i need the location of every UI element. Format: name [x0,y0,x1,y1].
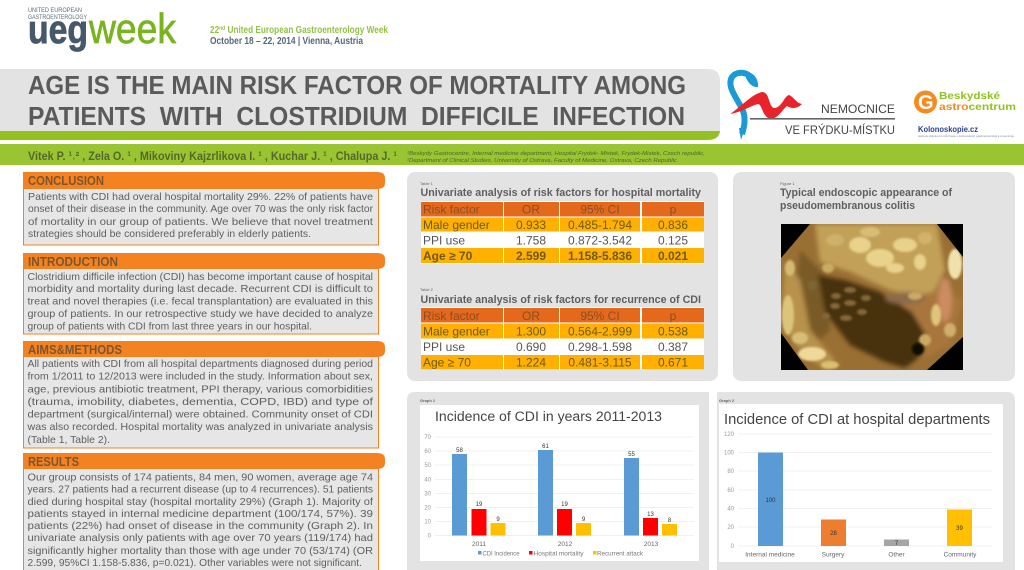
panel: aims and methods: AIMS&METHODS [28,342,122,357]
table 2: recurrence of CDI: 0.481-3.115 [568,356,632,370]
chart: grouped bars 2011-2013: 30 [424,492,432,498]
chart: department bars: 28 [830,531,837,537]
panel: introduction: morbidity and mortality during last decade. Recurrent CDI is difficult to [28,283,373,295]
table 2: recurrence of CDI: 0.387 [658,340,688,354]
chart: grouped bars 2011-2013: 20 [424,506,432,512]
table 2: recurrence of CDI: Table 2 [420,287,434,292]
panel: results: died during hospital stay (hospital mortality 29%) (Graph 1). Majority of [28,496,373,508]
panel: graph 1 incidence in years: Incidence of CDI in years 2011-2013 [435,409,662,424]
chart: grouped bars 2011-2013: 0 [428,534,432,540]
panel: introduction: group of patients. In our retrospective study we have decided to analyze [28,308,373,320]
logo: Nemocnice ve Frýdku-Místku [730,72,895,140]
logo: UEG Week: ueg [28,8,88,52]
logo: Kolonoskopie.cz: Kolonoskopie.cz [918,124,978,134]
table 2: recurrence of CDI: 1.300 [516,324,546,338]
logo: UEG Week [28,5,177,52]
panel: graph 2 incidence at departments: Incidence of CDI at hospital departments [724,412,990,428]
panel: aims and methods: department (surgical/internal) were obtained. Community onset of CDI [28,408,373,420]
chart: department bars: Other [888,552,905,558]
chart: department bars [724,432,992,558]
panel: conclusion: Patients with CDI had overal hospital mortality 29%. 22% of patients have [28,191,373,203]
logo: UEG Week: UNITED EUROPEAN [28,8,82,14]
table 2: recurrence of CDI: 0.564-2.999 [568,324,632,338]
table 2: recurrence of CDI: 95% CI [580,309,620,323]
panel: aims and methods: (Table 1, Table 2). [28,434,110,446]
panel: figure 1 endoscopic image [733,172,1015,381]
logo: Beskydské Gastrocentrum [914,90,1016,114]
authors and affiliations band: ²Department of Clinical Studies, University of Ostrava, Faculty of Medicine, Ostrava, Czech Republic [407,158,677,164]
authors and affiliations band: Vitek P. ¹˒² , Zela O. ¹ , Mikoviny Kajzrlikova I. ¹ , Kuchar J. ¹ , Chalupa J. ¹ [28,149,397,163]
table 2: recurrence of CDI: 0.690 [516,340,546,354]
chart: department bars: 120 [724,432,735,438]
logo: UEG Week: GASTROENTEROLOGY [28,15,87,21]
logo: Nemocnice ve Frýdku-Místku: VE FRÝDKU-MÍSTKU [785,122,895,137]
chart: grouped bars 2011-2013: 2013 [644,541,659,548]
chart: grouped bars 2011-2013: 2012 [558,541,573,548]
chart: grouped bars 2011-2013: 40 [424,478,432,484]
table 2: recurrence of CDI: 1.224 [516,356,546,370]
chart: grouped bars 2011-2013: 58 [456,448,463,454]
logo: Kolonoskopie.cz: webová stránka pro informace o kolonoskopii, gastroenterologii a screeningu [918,135,1015,138]
table 1: hospital mortality: PPI use [423,234,465,248]
chart: grouped bars 2011-2013: 61 [542,444,549,450]
event information: nd [219,26,225,32]
table 2: recurrence of CDI: 0.538 [658,324,688,338]
chart legend: Hospital mortality [534,550,584,558]
chart: department bars: 7 [895,541,899,547]
logo: Beskydské Gastrocentrum: Beskydské [939,91,1001,102]
panel: aims and methods: (trauma, imobility, diabetes, dementia, COPD, IBD) and type of [28,396,373,408]
event information [210,25,388,47]
table 2: recurrence of CDI: Risk factor [423,309,480,323]
chart: department bars: Surgery [822,552,845,558]
table 2: recurrence of CDI: p [670,309,677,323]
title banner: PATIENTS WITH CLOSTRIDIUM DIFFICILE INFECTION [28,101,685,131]
chart: grouped bars 2011-2013: 50 [424,463,432,469]
chart: grouped bars 2011-2013: 9 [582,517,586,523]
panel: results: years. 27 patients had a recurrent disease (up to 4 recurrences). 51 patients [28,484,373,496]
panel: conclusion: onset of their disease in the community. Age over 70 was the only risk factor [28,203,373,215]
chart: grouped bars 2011-2013: 60 [424,449,432,455]
panel: graph 2 incidence at departments [717,392,1015,570]
panel: aims and methods: age, previous antibiotic treatment, PPI therapy, various comorbidities [28,384,373,396]
chart: department bars: 39 [956,526,963,532]
chart: grouped bars 2011-2013: 19 [476,502,483,508]
panel: figure 1 endoscopic image: pseudomembranous colitis [780,200,915,212]
chart: department bars: Internal medicine [745,552,795,558]
chart: department bars: Community [944,552,977,558]
logo: Beskydské Gastrocentrum: astro centrum [939,102,1016,113]
chart: department bars: 80 [727,469,735,475]
table 1: hospital mortality [420,181,704,264]
logo: Kolonoskopie.cz [918,124,1015,138]
table 1: hospital mortality: Table 1 [420,181,434,186]
chart: department bars: 100 [765,498,776,504]
chart: department bars: 40 [727,506,735,512]
logo: Nemocnice ve Frýdku-Místku: NEMOCNICE [821,102,895,116]
panel: conclusion: of mortality in our group of patients. We believe that novel treatment [28,216,373,228]
panel: aims and methods: from 1/2011 to 12/2013 were included in the study. Information about sex, [28,370,373,382]
panel: introduction [23,253,385,334]
table 1: hospital mortality: Univariate analysis of risk factors for hospital mortality [420,187,702,199]
logo: UEG Week: week [88,5,177,52]
panel: figure 1 endoscopic image: Typical endoscopic appearance of [780,187,952,199]
chart: grouped bars 2011-2013: 19 [561,502,568,508]
panel: aims and methods: All patients with CDI from all hospital departments diagnosed during period [28,358,373,370]
event information: 22 [210,25,221,36]
chart: grouped bars 2011-2013: 55 [628,452,635,458]
chart: grouped bars 2011-2013: 10 [424,520,432,526]
chart: grouped bars 2011-2013: 13 [647,512,654,518]
panel: graph 2 incidence at departments: Graph 2 [719,398,735,403]
table 1: hospital mortality: Male gender [423,218,490,232]
table 1: hospital mortality: 0.872-3.542 [568,234,632,248]
title banner: AGE IS THE MAIN RISK FACTOR OF MORTALITY AMONG [28,70,686,100]
table 1: hospital mortality: 95% CI [580,202,620,216]
chart legend [478,550,644,558]
panel: introduction: treat and novel therapies (i.e. fecal transplantation) are evaluated in this [28,296,373,308]
table 2: recurrence of CDI: Univariate analysis of risk factors for recurrence of CDI [420,294,701,306]
authors and affiliations band [0,144,1024,165]
panel: conclusion: strategies should be considered preferably in elderly patients. [28,228,311,240]
panel: conclusion [23,172,385,245]
event information: October 18 – 22, 2014 | Vienna, Austria [210,36,363,47]
table 2: recurrence of CDI: 0.671 [658,356,688,370]
chart: grouped bars 2011-2013: 70 [424,435,432,441]
table 1: hospital mortality: 0.485-1.794 [568,218,632,232]
table 1: hospital mortality: 0.021 [658,249,688,263]
panel: introduction: group of patients with CDI from last three years in our hospital. [28,320,312,332]
table 1: hospital mortality: 1.758 [516,234,546,248]
event information: United European Gastroenterology Week [225,25,388,36]
title banner [0,69,720,140]
panel: conclusion: CONCLUSION [28,173,104,188]
table 1: hospital mortality: Age ≥ 70 [423,249,473,263]
chart: grouped bars 2011-2013 [424,435,694,548]
table 1: hospital mortality: 1.158-5.836 [568,249,632,263]
table 2: recurrence of CDI: 0.298-1.598 [568,340,632,354]
panel: aims and methods: was also recorded. Hospital mortality was analyzed in univariate analysis [26,421,373,433]
table 2: recurrence of CDI: OR [522,309,540,323]
chart: department bars: 20 [727,525,735,531]
chart: grouped bars 2011-2013: 9 [496,517,500,523]
panel: results: RESULTS [28,454,79,469]
chart: grouped bars 2011-2013: 8 [668,518,672,524]
table 1: hospital mortality: 0.125 [658,234,688,248]
table 2: recurrence of CDI: Age ≥ 70 [423,356,471,370]
chart legend: Recurrent attack [597,550,644,558]
authors and affiliations band: ¹Beskydy Gastrocentre, Internal medicine department, Hospital Frydek- Mistek, Frydek-Mistek, Czech republic, [407,151,705,157]
panel: results: univariate analysis only patients with age over 70 years (119/174) had [28,532,373,544]
table 1: hospital mortality: 0.836 [658,218,688,232]
panel: tables background [407,172,718,381]
panel: results: Our group consists of 174 patients, 84 men, 90 women, average age 74 [28,472,373,484]
panel: results: patients (22%) had onset of disease in the community (Graph 2). In [28,520,373,532]
panel: aims and methods [23,341,385,448]
table 2: recurrence of CDI: PPI use [423,340,465,354]
table 1: hospital mortality: OR [522,202,540,216]
chart: department bars: 100 [724,450,735,456]
table 1: hospital mortality: Risk factor [423,202,480,216]
panel: graph 1 incidence in years: Graph 1 [420,398,436,403]
panel: introduction: INTRODUCTION [28,254,118,269]
panel: introduction: Clostridium difficile infection (CDI) has become important cause of hospital [28,271,373,283]
table 2: recurrence of CDI [420,287,704,370]
table 2: recurrence of CDI: Male gender [423,324,490,338]
panel: figure 1 endoscopic image: Figure 1 [780,181,795,186]
chart: grouped bars 2011-2013: 2011 [472,541,486,548]
chart: department bars: 60 [727,488,735,494]
panel: results: patients stayed in internal medicine department (100/174, 57%). 39 [28,508,373,520]
table 1: hospital mortality: p [670,202,677,216]
table 1: hospital mortality: 0.933 [516,218,546,232]
panel: results: significantly higher mortality than those with age under 70 (53/174) (OR [28,545,373,557]
logo: Beskydské Gastrocentrum: G [918,92,934,114]
panel: results: 2.599, 95%CI 1.158-5.836, p=0.021). Other variables were not significant. [28,557,362,569]
panel: results [23,453,385,570]
chart legend: CDI Incidence [482,550,520,558]
chart: department bars: 0 [731,544,735,550]
panel: graph 1 incidence in years [407,392,709,570]
table 1: hospital mortality: 2.599 [516,249,546,263]
